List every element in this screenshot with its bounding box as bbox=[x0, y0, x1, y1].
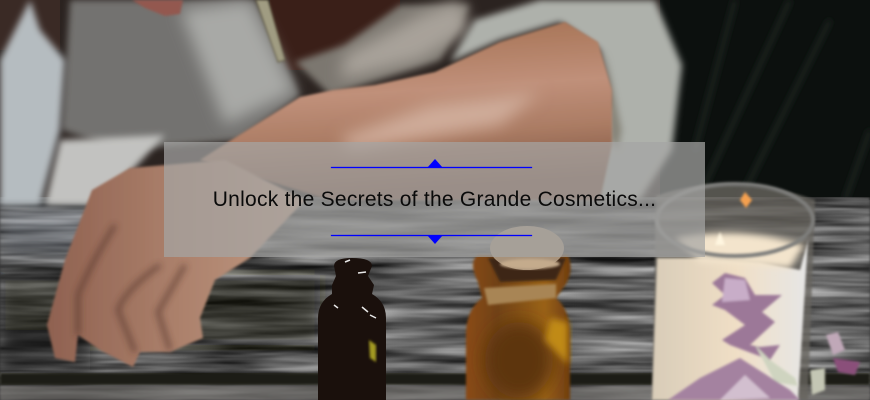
flowers bbox=[668, 273, 860, 400]
dark dropper bottle bbox=[318, 258, 386, 400]
bottom diamond marker bbox=[428, 236, 442, 244]
translucent title panel bbox=[164, 142, 705, 257]
top divider line bbox=[331, 167, 532, 168]
right sleeve bbox=[450, 0, 682, 200]
candle in glass bbox=[652, 184, 815, 400]
amber oil bottle bbox=[466, 226, 571, 400]
title text: Unlock the Secrets of the Grande Cosmetics... bbox=[213, 188, 656, 211]
wall and dark backdrop bbox=[0, 0, 870, 200]
top diamond marker bbox=[428, 159, 442, 167]
forearm bbox=[200, 22, 612, 200]
table bbox=[0, 197, 870, 400]
dropper bbox=[256, 0, 285, 62]
shirt bbox=[0, 0, 470, 205]
cork bbox=[488, 226, 566, 282]
hand bbox=[47, 160, 305, 367]
curtain bbox=[660, 0, 870, 200]
bottom divider line bbox=[331, 235, 532, 236]
fingertip at top bbox=[132, 0, 183, 16]
